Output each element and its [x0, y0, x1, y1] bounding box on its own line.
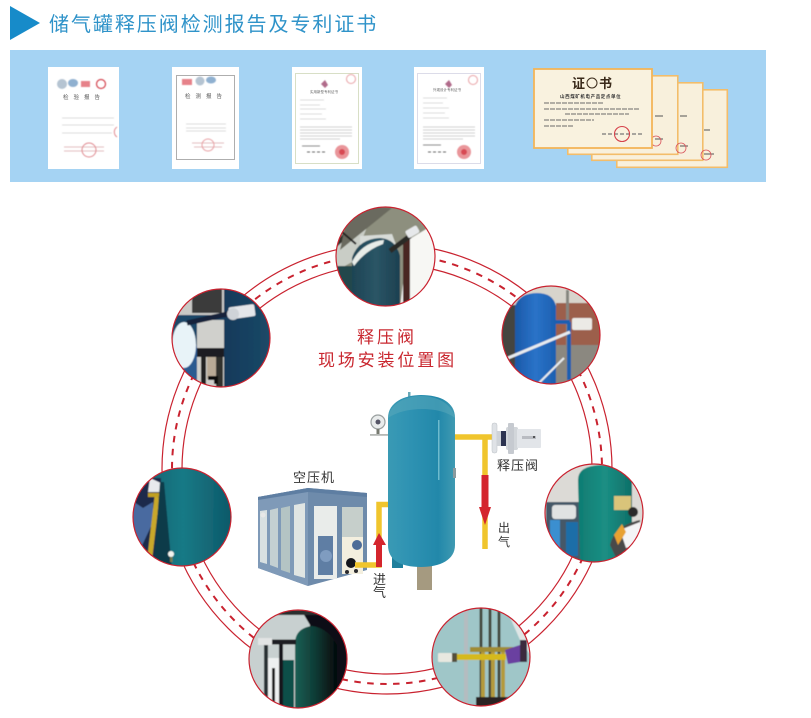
ring path: [162, 244, 612, 694]
document: design patent: [414, 67, 484, 169]
photo circle: right: [542, 461, 646, 565]
outlet label: 气: [498, 534, 510, 549]
photo circle: top: [334, 205, 438, 310]
inlet label: 气: [373, 585, 386, 600]
compressor unit: [258, 488, 367, 586]
panel: certificates: [10, 50, 766, 182]
relief valve: [492, 423, 541, 454]
compressor label: 空压机: [293, 470, 335, 485]
relief valve label: 释压阀: [497, 458, 539, 473]
diagram title: 现场安装位置图: [318, 351, 457, 370]
inlet pipe: [355, 504, 389, 565]
inlet label: [373, 572, 386, 600]
outlet pipe: [455, 437, 493, 549]
outlet label: [498, 521, 510, 549]
photo circle: lower left: [247, 608, 351, 712]
photo circle: lower right: [430, 606, 534, 710]
document: test report: [172, 67, 239, 169]
outlet label: 出: [498, 521, 510, 535]
photo circle: upper right: [500, 284, 602, 386]
certificate stack: 书: [599, 76, 612, 91]
certificate stack: [534, 69, 727, 167]
inlet arrow: [373, 533, 386, 567]
certificate stack: 证: [572, 76, 585, 91]
document: utility patent: 实用新型专利证书: [310, 89, 338, 94]
title arrow icon: [10, 6, 40, 40]
document: inspection report: [48, 67, 119, 169]
air receiver tank: [388, 392, 456, 590]
diagram title: [318, 328, 457, 370]
document: inspection report: 检验报告: [63, 93, 105, 101]
document: design patent: 外观设计专利证书: [433, 87, 461, 92]
photo circle: left: [131, 466, 235, 570]
document: utility patent: [292, 67, 362, 169]
certificate stack: 山西煤矿机电产品定点单位: [560, 93, 621, 100]
photo circle: upper left: [170, 287, 272, 389]
document: test report: 检测报告: [185, 92, 227, 100]
inlet label: 进: [373, 572, 386, 587]
pressure gauge: [370, 415, 388, 436]
diagram title: 释压阀: [357, 328, 417, 347]
outlet arrow: [479, 475, 491, 525]
heading: 储气罐释压阀检测报告及专利证书: [49, 13, 378, 36]
